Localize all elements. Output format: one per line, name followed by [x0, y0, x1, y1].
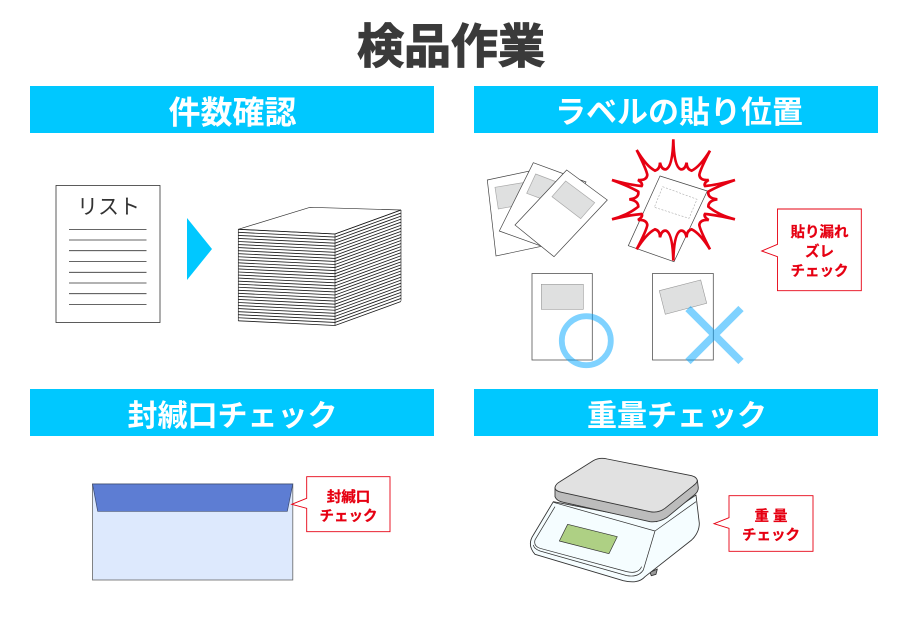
icon: list document: リスト: [77, 196, 140, 219]
panel: weight check: [474, 389, 878, 582]
heading: weight check: [474, 389, 878, 436]
heading: count check: [30, 86, 434, 133]
icon: wrong label position: [652, 274, 741, 362]
heading: count check: 件数確認: [168, 94, 297, 130]
callout: label check: [762, 209, 861, 291]
heading: label position: [474, 86, 878, 133]
callout: seal check: 封緘口: [327, 488, 370, 506]
icon: list document: [56, 186, 160, 322]
callout: weight check: チェック: [742, 527, 800, 544]
callout: label check: チェック: [790, 263, 848, 280]
callout: seal check: [292, 477, 390, 532]
arrow: [187, 218, 212, 280]
title: 検品作業: [357, 20, 545, 73]
panel: count check: [30, 86, 434, 326]
icon: paper stack: [238, 207, 401, 326]
heading: seal check: 封緘口チェック: [128, 400, 338, 433]
callout: weight check: 重 量: [754, 508, 788, 525]
callout: seal check: チェック: [320, 508, 378, 525]
panel: label position: [474, 86, 878, 365]
callout: label check: 貼り漏れ: [790, 224, 849, 241]
heading: seal check: [30, 389, 434, 436]
icon: correct label position: [532, 274, 611, 365]
panel: seal check: [30, 389, 434, 580]
heading: weight check: 重量チェック: [587, 400, 767, 433]
callout: label check: ズレ: [805, 242, 834, 260]
icon: envelope: [92, 484, 293, 580]
icon: overlapping documents: [487, 163, 607, 257]
heading: label position: ラベルの貼り位置: [555, 95, 803, 130]
icon: missing label with red burst: [612, 139, 735, 262]
callout: weight check: [714, 496, 813, 551]
icon: weighing scale: [530, 458, 699, 582]
